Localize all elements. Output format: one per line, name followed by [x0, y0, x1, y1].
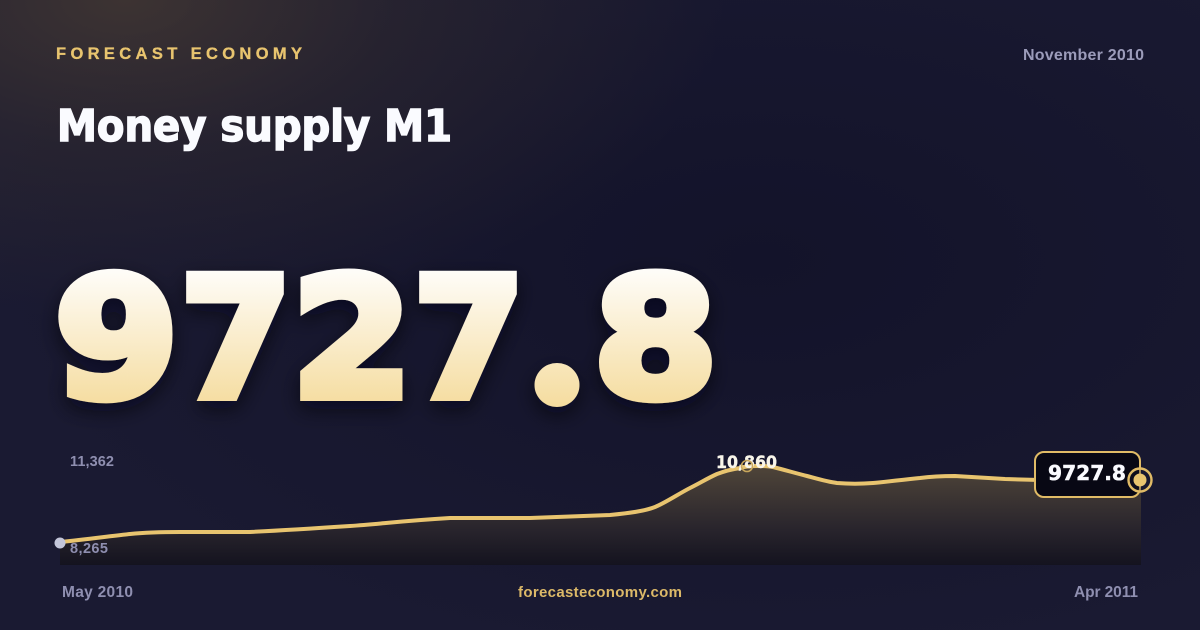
big value: 9	[55, 244, 178, 435]
big value: 2	[292, 243, 412, 435]
big value: 7	[413, 244, 525, 436]
end value callout: 9727.8	[1048, 461, 1126, 485]
chart	[54, 452, 1152, 565]
peak marker	[742, 460, 752, 472]
website: forecasteconomy.com	[518, 584, 682, 601]
brand label: FORECAST ECONOMY	[56, 45, 302, 63]
big value: .	[540, 303, 578, 420]
end marker	[1128, 468, 1152, 492]
min label: 8,265	[70, 541, 108, 557]
title: Money supply M1	[57, 101, 452, 152]
start point	[54, 538, 66, 548]
max label: 11,362	[70, 454, 114, 470]
end value callout	[1035, 452, 1140, 497]
peak value: 10,860	[716, 453, 777, 473]
big value	[55, 243, 717, 436]
trend line	[60, 466, 1141, 542]
area fill	[60, 466, 1141, 565]
start date: May 2010	[62, 584, 133, 601]
end date: Apr 2011	[1074, 584, 1138, 601]
big value: 7	[180, 244, 292, 436]
date: November 2010	[1023, 47, 1144, 64]
big value: 8	[594, 244, 717, 435]
